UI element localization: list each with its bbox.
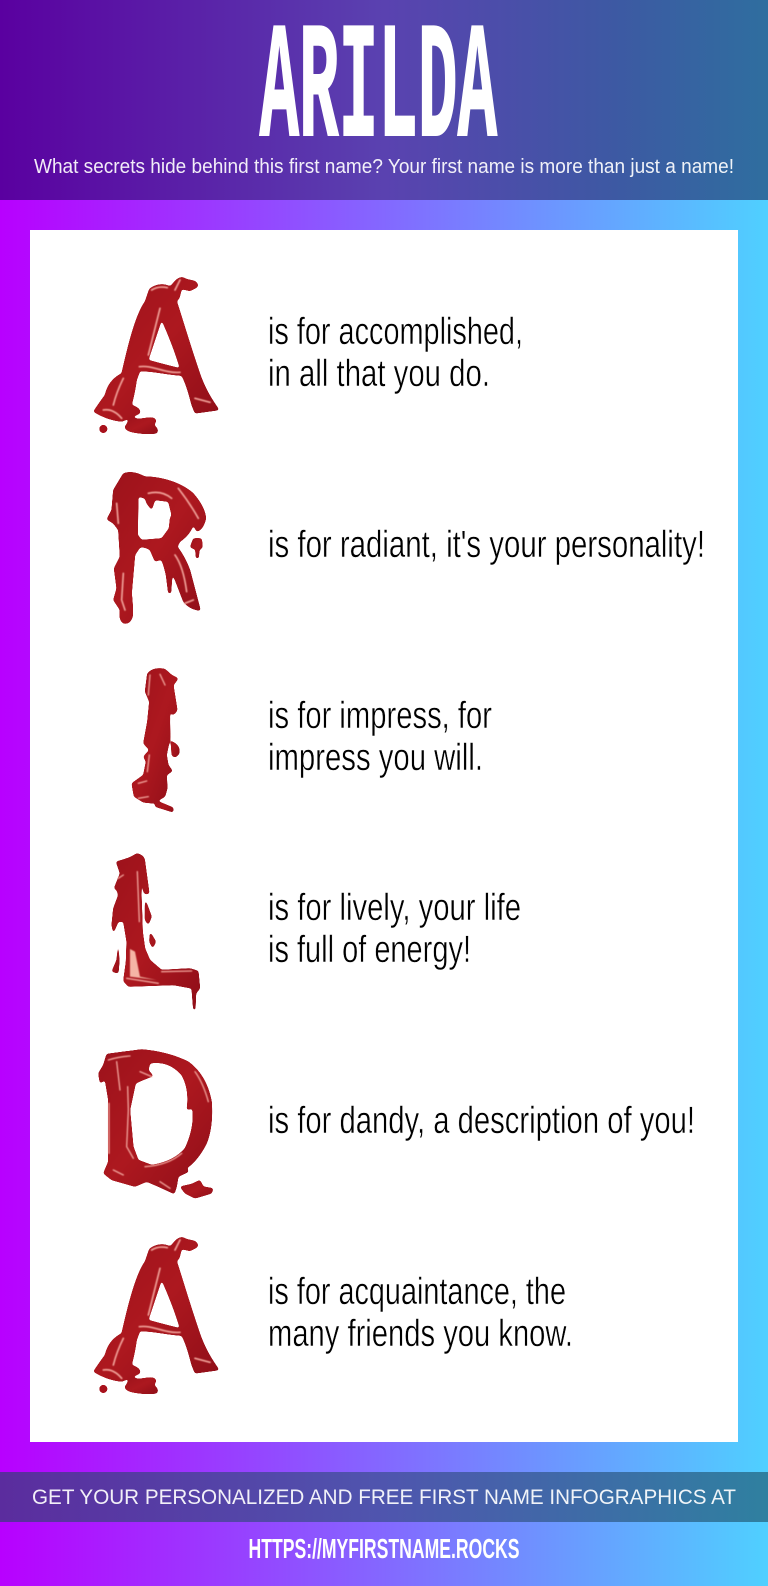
footer band bbox=[0, 1472, 768, 1522]
subtitle: What secrets hide behind this first name? Your first name is more than just a name! bbox=[34, 156, 734, 178]
title: ARILDA bbox=[260, 0, 497, 185]
text: L line: is full of energy! bbox=[268, 929, 471, 971]
text: L line: is for lively, your life bbox=[268, 887, 521, 929]
text: A line second bbox=[268, 1271, 573, 1355]
footer text: GET YOUR PERSONALIZED AND FREE FIRST NAME INFOGRAPHICS AT bbox=[32, 1485, 736, 1509]
icon: blood letter A second bbox=[93, 1237, 219, 1394]
text: A line bbox=[268, 311, 523, 395]
text: A line: in all that you do. bbox=[268, 353, 490, 395]
icon: blood letter L bbox=[112, 853, 200, 1010]
text: I line bbox=[268, 695, 492, 779]
text: A line second: many friends you know. bbox=[268, 1313, 573, 1355]
text: A line: is for accomplished, bbox=[268, 311, 523, 353]
text: I line: impress you will. bbox=[268, 737, 483, 779]
icon: blood letter A bbox=[93, 277, 219, 434]
icon: blood letter D bbox=[98, 1049, 213, 1198]
text: L line bbox=[268, 887, 521, 971]
panel: white card bbox=[30, 230, 738, 1442]
icon: blood letter R bbox=[107, 472, 206, 624]
text: I line: is for impress, for bbox=[268, 695, 492, 737]
icon: blood letter I bbox=[132, 668, 180, 812]
footer URL: HTTPS://MYFIRSTNAME.ROCKS bbox=[248, 1533, 520, 1564]
header band bbox=[0, 0, 768, 200]
text: A line second: is for acquaintance, the bbox=[268, 1271, 566, 1313]
